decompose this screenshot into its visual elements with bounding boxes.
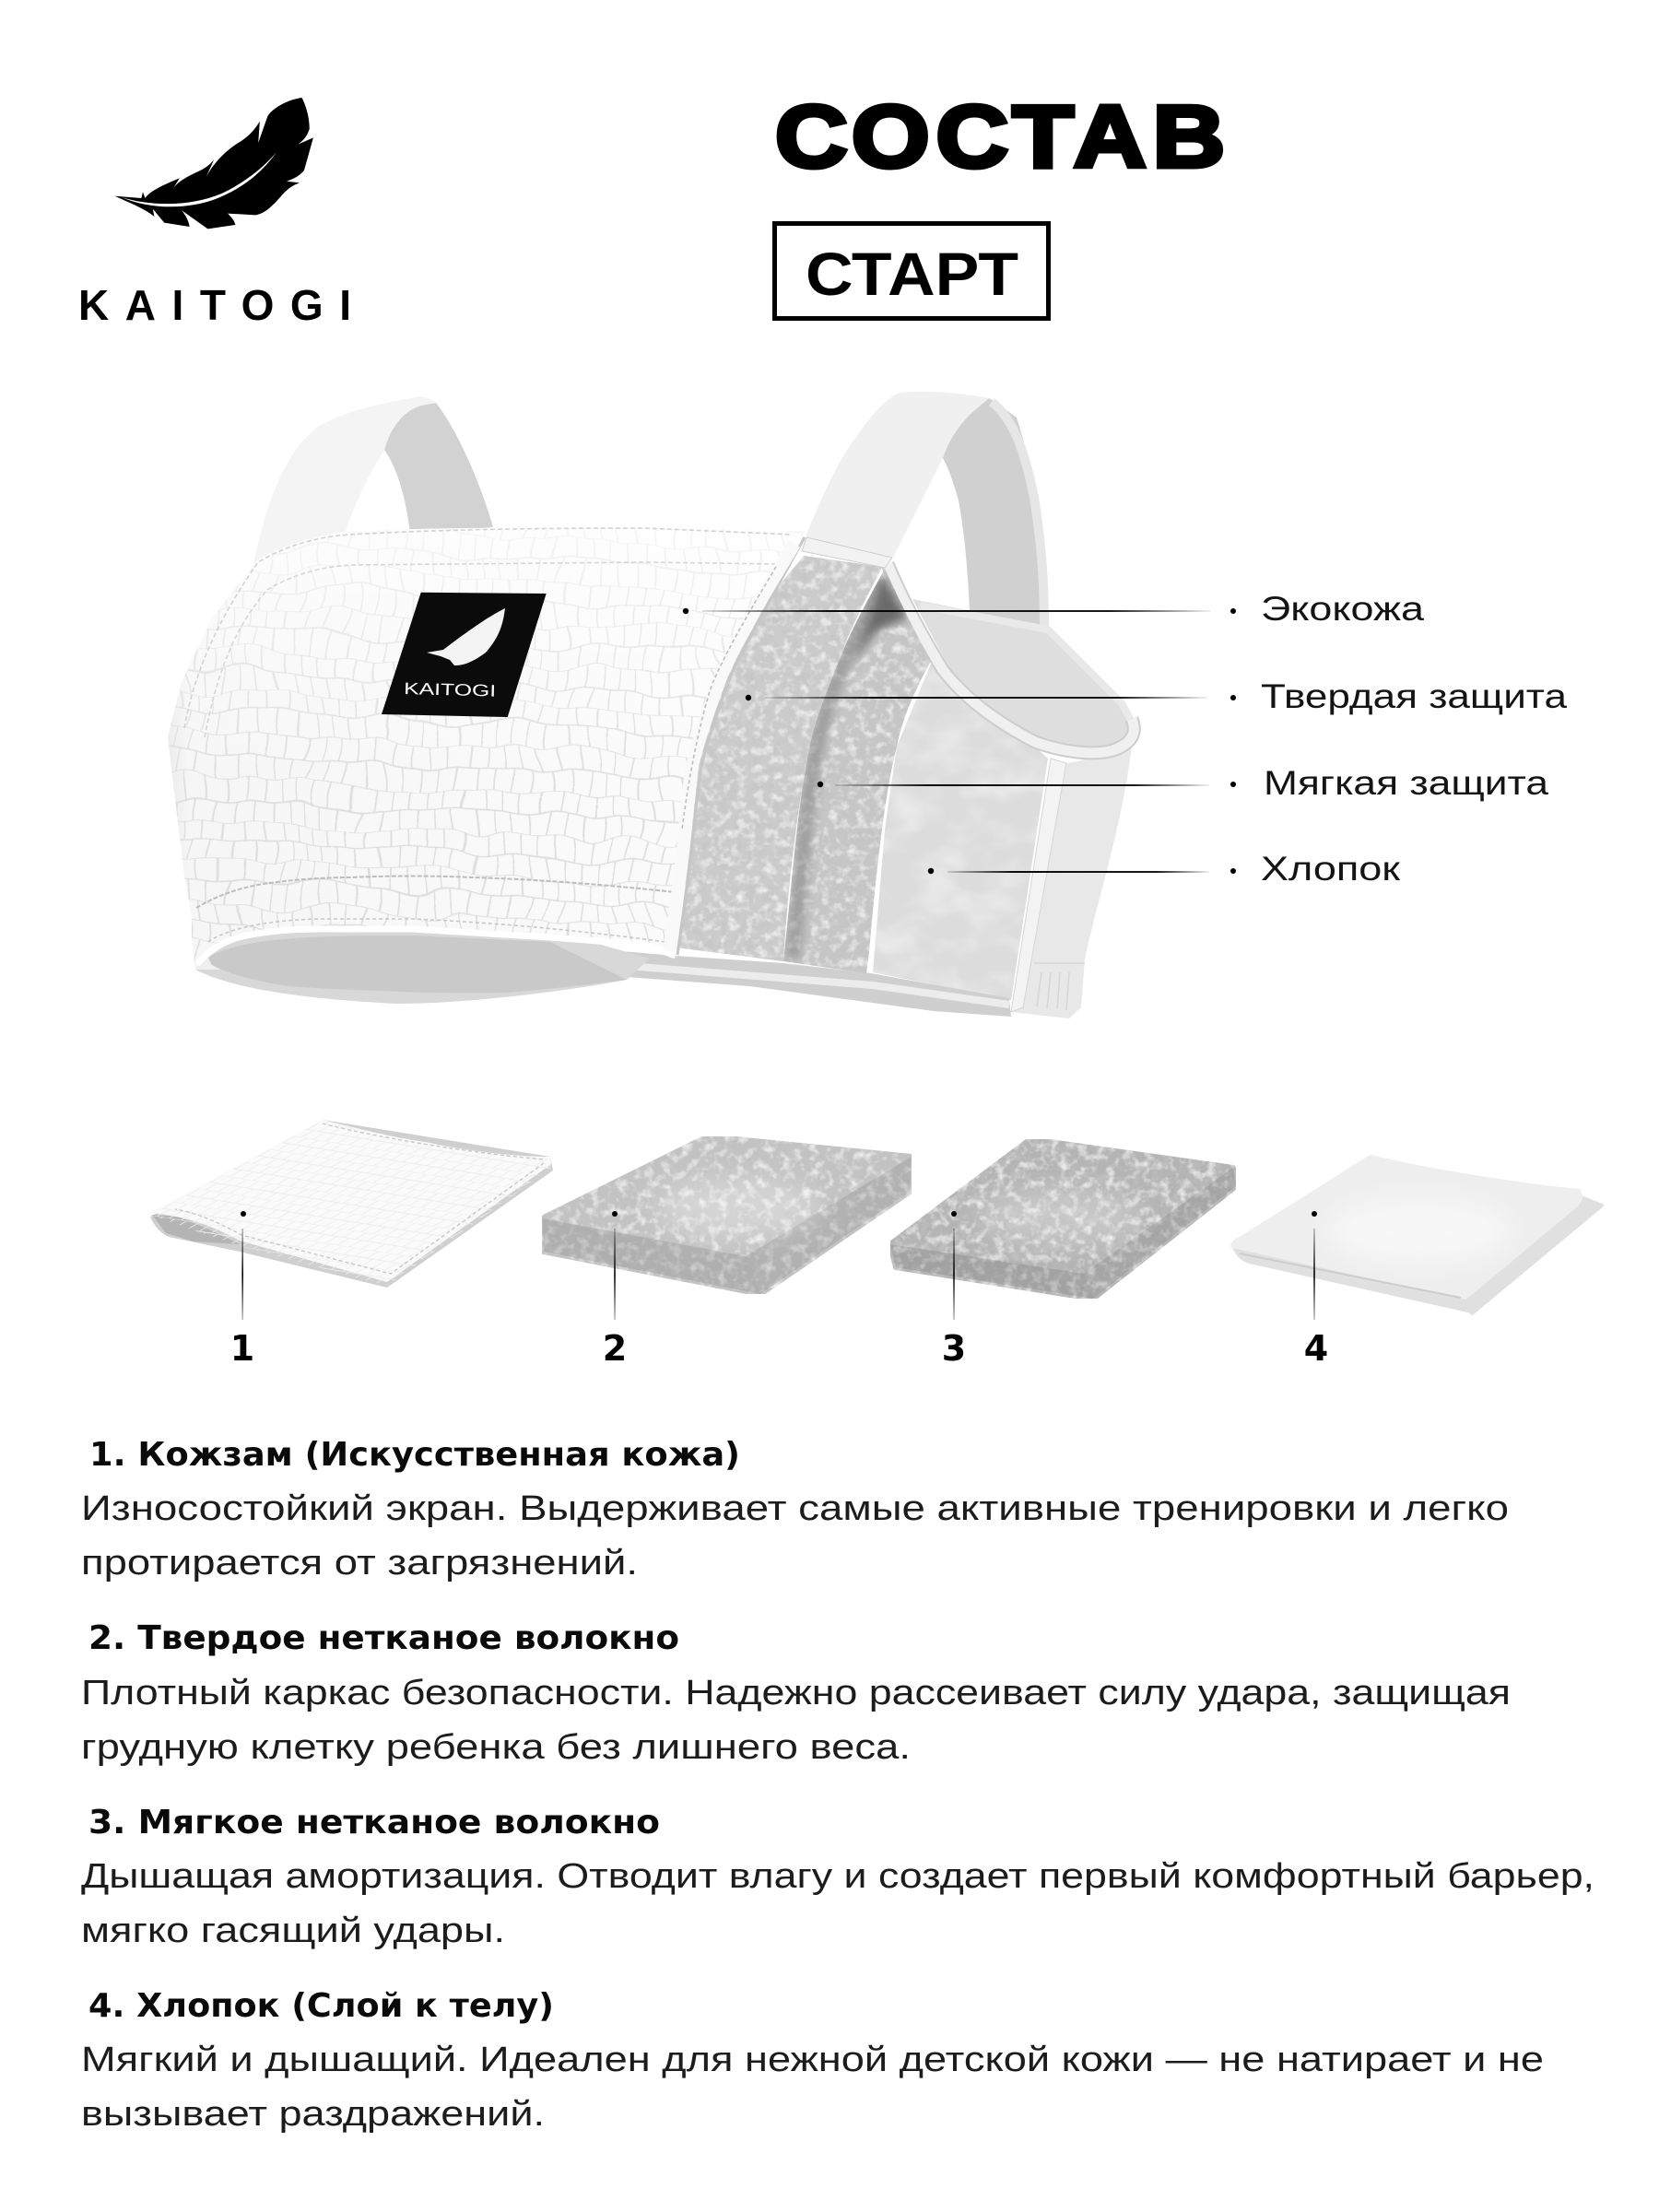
eco-leather front panel xyxy=(168,527,806,970)
text block: material 1: протирается от загрязнений. xyxy=(81,1544,638,1583)
strap base tab xyxy=(802,537,892,568)
text block: material 4: 4. Хлопок (Слой к телу) xyxy=(88,1987,554,2025)
croc texture xyxy=(169,527,802,962)
cotton layer xyxy=(873,664,1048,1000)
marker 1 xyxy=(230,1211,254,1369)
logo: Kaitogi feather and wordmark xyxy=(78,98,351,329)
underside of front panel xyxy=(192,922,650,1004)
marker 4 xyxy=(1304,1211,1328,1369)
right strap xyxy=(806,392,1048,631)
text block: material 3: мягко гасящий удары. xyxy=(81,1912,505,1950)
text block: material 2 xyxy=(81,1619,1511,1767)
text block: material 3: Дышащая амортизация. Отводит влагу и создает первый комфортный барьер, xyxy=(81,1857,1594,1896)
text block: material 2: Плотный каркас безопасности. Надежно рассеивает силу удара, защищая xyxy=(81,1674,1511,1712)
marker 3: 3 xyxy=(942,1328,966,1369)
text block: material 1: Износостойкий экран. Выдерживает самые активные тренировки и легко xyxy=(81,1489,1509,1528)
marker 2: 2 xyxy=(603,1328,627,1369)
label wordmark: KAITOGI xyxy=(404,679,496,700)
material samples row xyxy=(147,1115,1602,1369)
black label patch xyxy=(382,593,547,717)
sample 1: eco-leather xyxy=(147,1115,558,1290)
soft protection layer xyxy=(783,569,931,973)
bottom binding xyxy=(627,966,1009,1005)
product: chest protector cutaway xyxy=(157,392,1134,1018)
text block: material 3: 3. Мягкое нетканое волокно xyxy=(88,1804,660,1841)
text block: material 4: Мягкий и дышащий. Идеален для нежной детской кожи — не натирает и не xyxy=(81,2041,1544,2079)
crease shadow on soft layer xyxy=(793,576,908,959)
callout: Экокожа: Экокожа xyxy=(1261,590,1425,628)
callout: Хлопок: Хлопок xyxy=(1261,850,1401,888)
sample 4: cotton xyxy=(1232,1157,1602,1313)
leather hem stitching xyxy=(184,528,793,964)
callout: Экокожа xyxy=(683,590,1425,628)
leather edge binding xyxy=(669,537,805,955)
back panel rim xyxy=(920,606,1134,725)
inner lining xyxy=(912,599,1134,751)
bottom strip xyxy=(599,949,1011,1017)
sample 2: hard fibre xyxy=(542,1136,912,1294)
label feather xyxy=(427,608,505,665)
icon: feather xyxy=(114,98,313,229)
badge: СТАРТ: СТАРТ xyxy=(806,240,1018,308)
callout: Хлопок xyxy=(928,850,1401,888)
text block: material 2: грудную клетку ребенка без лишнего веса. xyxy=(81,1728,911,1767)
callout lines and dots xyxy=(683,590,1568,888)
text block: material 1: 1. Кожзам (Искусственная кожа) xyxy=(89,1436,740,1474)
wordmark: KAITOGI: KAITOGI xyxy=(78,281,351,329)
text block: material 4 xyxy=(81,1987,1544,2134)
left strap xyxy=(253,396,493,564)
vertical binding xyxy=(1011,759,1066,1012)
text block: material 1 xyxy=(81,1436,1509,1583)
title: СОСТАВ: СОСТАВ xyxy=(775,88,1231,186)
text block: material 2: 2. Твердое нетканое волокно xyxy=(88,1619,679,1657)
text block: material 4: вызывает раздражений. xyxy=(81,2095,545,2134)
sample 3: soft fibre xyxy=(890,1139,1236,1299)
hard protection layer xyxy=(676,556,882,961)
marker 2 xyxy=(603,1211,627,1369)
marker 3 xyxy=(942,1211,966,1369)
callout: Мягкая защита xyxy=(818,764,1548,802)
side band xyxy=(1011,728,1134,1018)
callout: Твердая защита xyxy=(746,677,1568,715)
callout: Твердая защита: Твердая защита xyxy=(1261,677,1568,715)
callout: Мягкая защита: Мягкая защита xyxy=(1264,764,1548,802)
armhole binding xyxy=(888,564,1134,753)
badge: СТАРТ xyxy=(774,223,1049,319)
marker 1: 1 xyxy=(230,1328,254,1369)
side band ribs xyxy=(1034,963,1085,1010)
marker 4: 4 xyxy=(1304,1328,1328,1369)
text block: material 3 xyxy=(81,1804,1594,1950)
